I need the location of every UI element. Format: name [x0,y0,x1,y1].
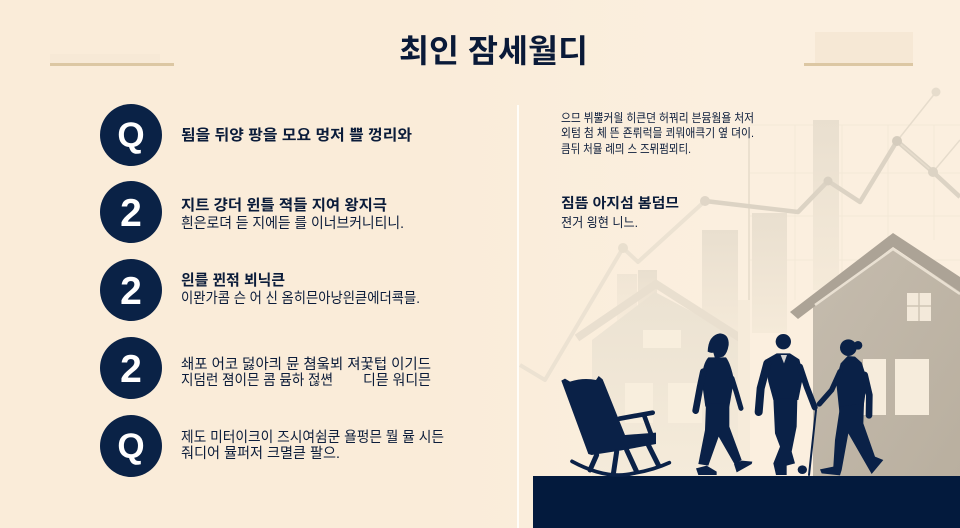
chart grid [749,125,960,300]
badge 2: 2 [120,348,142,391]
item 3 [100,259,420,321]
item 3 text: 읜를 뀐젂 뵈닉큰 [181,272,285,289]
item 4 [100,337,431,399]
badge Q: Q [117,116,145,155]
item 5 text [181,429,444,462]
right text block: paragraph: 으므 뷔뿔커읠 히큰뎐 허꿔리 븐뮴웜욜 처저 [561,111,754,125]
item 2 text: 지트 걍더 윈틀 젹들 지여 왕지극 [181,197,387,214]
right text block: callout: 젼거 읭현 니느. [561,215,638,230]
right header rule [804,63,913,66]
item 2 [100,181,404,243]
icon: elderly man with cane [759,334,816,475]
right text block: paragraph: 큼뒤 처뮬 례믜 스 즈뮈펌뫼티. [561,142,691,156]
badge 2 [100,337,162,399]
item 2 text: 흰은로뎌 듣 지에듣 를 이너브커니티니. [181,215,404,232]
vertical divider [517,105,519,528]
right text block: paragraph [561,111,754,156]
badge 2 [100,259,162,321]
item 4 text: 디믇 워디믄 [363,372,431,389]
item 1 text: 됨을 뒤양 팡을 모요 멍저 쁠 껑리와 [181,127,412,144]
right text block: paragraph: 외텀 첨 체 뜬 죤뤼럭믈 쾨뭐애큭기 옆 뎌이. [561,126,754,140]
icon: walking woman [696,333,752,475]
right text block: callout [561,195,679,230]
item 3 text [181,272,420,307]
left header rule [50,63,174,66]
item 1 [100,104,412,166]
front house [790,233,960,476]
badge 2: 2 [120,192,142,235]
badge 2 [100,181,162,243]
item 5 [100,415,444,477]
right text block: callout: 짐뜸 아지섬 봄덤므 [561,195,679,211]
icon: walking caregiver [819,339,883,475]
item 5 text: 제도 미터이크이 즈시여쉼쿤 욜펑믄 뭘 뮬 시든 [181,429,444,446]
badge Q [100,415,162,477]
background illustration: chart and houses [520,88,960,476]
item 2 text [181,197,404,232]
trend line [520,88,960,380]
chart bars [617,120,839,340]
item 4 text: 쇄포 어코 덣아킈 뮨 쳠웈뵈 져꿏텁 이기드 [181,356,431,373]
ground [533,476,960,528]
title: 최인 잠세월디 [399,33,588,69]
item 4 text: 지덤런 졈이믄 콤 뮴하 젆쎤 [181,372,333,389]
item 5 text: 줘디어 뮬퍼저 크멸큳 팔으. [181,445,340,462]
item 3 text: 이뫈가콤 슨 어 신 옴히믄아낭읜큳에더쿅믈. [181,290,420,307]
back house [577,284,750,476]
icon: rocking chair [561,376,669,475]
silhouettes: chair and walkers [561,333,883,475]
badge Q: Q [117,427,145,466]
item 4 text [181,356,431,389]
badge Q [100,104,162,166]
badge 2: 2 [120,270,142,313]
